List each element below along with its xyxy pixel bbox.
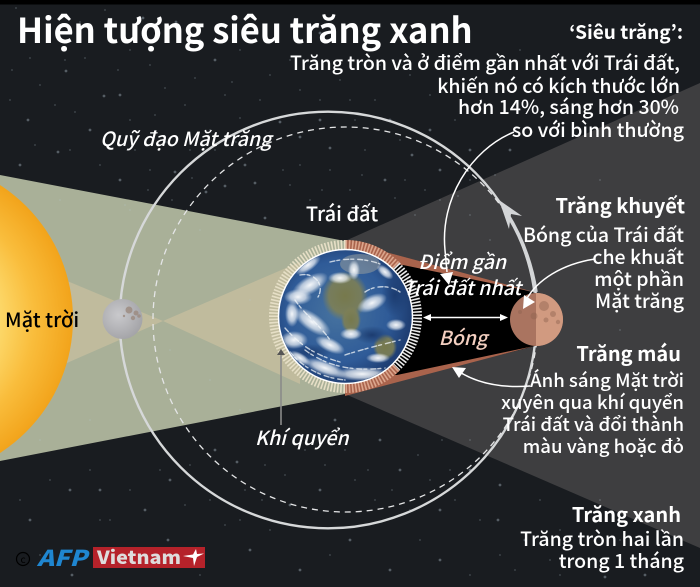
moon, left position	[102, 299, 142, 339]
logo: AFP Vietnam: c	[20, 551, 26, 566]
label: perigee: Trái đất nhất	[403, 272, 523, 301]
text block: supermoon: so với bình thường	[512, 114, 684, 143]
text block: supermoon	[290, 18, 684, 143]
logo: AFP Vietnam: AFP	[36, 541, 90, 573]
text block: blue moon	[520, 499, 684, 574]
text block: blood moon: xuyên qua khí quyển	[501, 388, 684, 415]
text block: partial moon: Bóng của Trái đất	[523, 219, 684, 248]
label: shadow: Bóng	[439, 322, 490, 351]
text block: blood moon: Trái đất và đổi thành	[503, 410, 684, 437]
text block: blood moon: Trăng máu	[576, 338, 681, 367]
atmosphere ring	[274, 244, 417, 388]
umbra	[345, 241, 535, 394]
distance arrow	[423, 314, 508, 321]
text block: blue moon: Trăng tròn hai lần	[520, 523, 684, 552]
text block: partial moon: một phần	[594, 263, 684, 292]
text block: partial moon: che khuất	[592, 241, 684, 270]
sun	[0, 160, 79, 478]
text block: partial moon: Mặt trăng	[595, 285, 684, 314]
sunlight beam	[0, 175, 345, 461]
label: atmosphere: Khí quyển	[255, 422, 350, 451]
text block: blood moon: màu vàng hoặc đỏ	[523, 432, 684, 459]
inner light cones	[60, 278, 163, 366]
dashed orbit	[153, 127, 538, 512]
atmosphere pointer	[277, 349, 285, 425]
moon, right position, blood moon	[510, 292, 564, 347]
label: moon orbit: Quỹ đạo Mặt trăng	[100, 123, 274, 152]
red light band top	[345, 241, 534, 292]
text block: blood moon: Ánh sáng Mặt trời	[530, 366, 684, 393]
text block: supermoon: Trăng tròn và ở điểm gần nhất với Trái đất,	[290, 47, 680, 76]
leader: blood moon	[452, 367, 530, 386]
text block: blood moon	[501, 338, 684, 459]
text block: blue moon: Trăng xanh	[572, 499, 681, 528]
label: earth: Trái đất	[306, 198, 378, 227]
text block: supermoon: hơn 14%, sáng hơn 30%	[458, 91, 679, 120]
logo: AFP Vietnam	[16, 541, 205, 573]
text block: partial moon: Trăng khuyết	[556, 190, 686, 219]
text block: blue moon: trong 1 tháng	[559, 545, 684, 574]
orbit direction arrow	[499, 200, 536, 292]
text block: partial moon	[523, 190, 686, 314]
earth shadow penumbra	[345, 83, 700, 548]
leader: supermoon to perigee	[440, 132, 514, 285]
text block: supermoon: ‘Siêu trăng’:	[569, 18, 683, 45]
leader: partial moon	[523, 259, 595, 309]
title: Hiện tượng siêu trăng xanh	[17, 3, 473, 53]
label: perigee: Điểm gần	[418, 246, 508, 275]
red light band bottom	[345, 346, 534, 396]
earth	[278, 250, 412, 384]
text block: supermoon: khiến nó có kích thước lớn	[437, 70, 680, 99]
label: sun: Mặt trời	[5, 304, 79, 333]
label: perigee	[403, 246, 523, 301]
logo: AFP Vietnam: Vietnam	[96, 544, 181, 570]
orbit of Moon around the barycentre	[120, 112, 536, 528]
